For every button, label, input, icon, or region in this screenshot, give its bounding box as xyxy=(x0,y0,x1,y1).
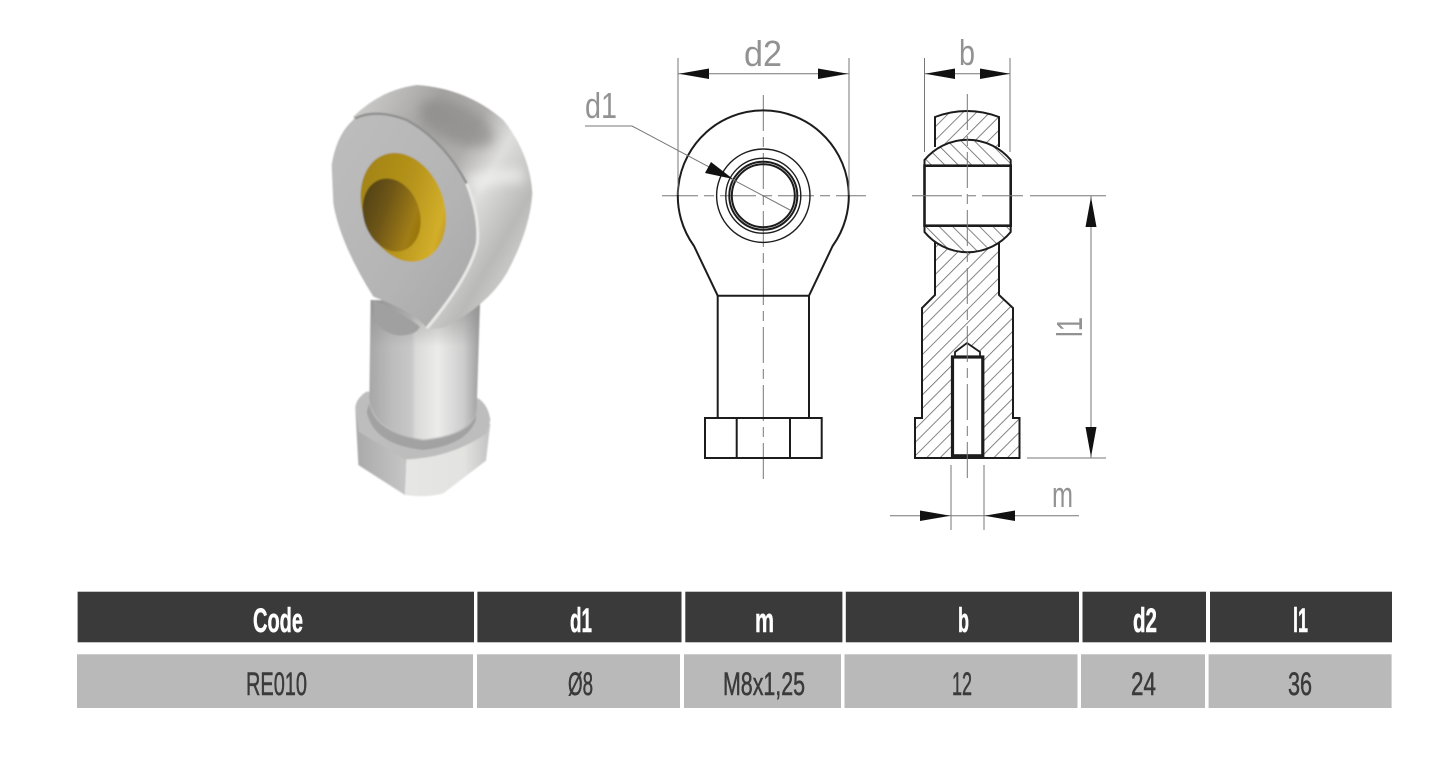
table header row: b xyxy=(958,602,969,640)
front view technical drawing xyxy=(585,33,866,480)
dimension d2: d2 xyxy=(744,33,782,74)
table header row: d1 xyxy=(570,602,592,640)
bearing circles xyxy=(717,149,810,242)
dimension d1 leader: d1 xyxy=(585,85,617,126)
dimension l1: l1 xyxy=(1049,317,1090,337)
photo: 3D rod end bearing xyxy=(332,85,532,496)
table data row: RE010 xyxy=(246,666,307,702)
table data row: 12 xyxy=(952,666,972,702)
table data row: Ø8 xyxy=(568,666,593,702)
side centre lines xyxy=(912,94,1106,480)
rim dark shading xyxy=(413,90,501,157)
table header row: m xyxy=(755,602,774,640)
table data row: 36 xyxy=(1288,666,1312,702)
dimension b xyxy=(924,32,1010,152)
dimension m: m xyxy=(1052,474,1073,515)
eye outer rim xyxy=(353,85,532,330)
table data row: M8x1,25 xyxy=(723,666,805,702)
bushing bore xyxy=(354,171,430,259)
rim highlight xyxy=(467,169,523,193)
table data row xyxy=(77,654,1392,708)
shaft outline xyxy=(718,296,809,418)
table data row: 24 xyxy=(1131,666,1156,702)
hex nut outline xyxy=(705,418,822,458)
table header row: l1 xyxy=(1293,602,1308,640)
side section technical drawing xyxy=(890,32,1106,530)
dimension b: b xyxy=(959,32,975,73)
threaded hole xyxy=(951,343,984,456)
dimension d2 xyxy=(678,33,849,195)
threaded base nut xyxy=(355,392,490,496)
table header row: Code xyxy=(253,602,303,640)
shaft shadow beneath eye xyxy=(370,300,480,347)
face edge shade xyxy=(355,114,467,183)
eye front face xyxy=(332,114,478,328)
cylindrical shaft xyxy=(369,300,480,439)
shaft collar shadow xyxy=(367,403,476,450)
spherical ball section xyxy=(924,140,1011,166)
dimension l1 xyxy=(1027,196,1106,458)
face edge highlight xyxy=(427,183,478,328)
table header row xyxy=(78,592,1392,642)
bore xyxy=(924,166,1011,226)
dimension d1 leader xyxy=(585,85,790,210)
eye outline xyxy=(678,110,849,296)
wedge flat xyxy=(373,300,420,336)
bronze bushing xyxy=(346,141,461,274)
front centre lines xyxy=(662,95,866,480)
table header row: d2 xyxy=(1133,602,1157,640)
dimension m xyxy=(890,465,1079,530)
body section xyxy=(915,240,1020,458)
housing top hatch xyxy=(935,111,999,147)
specification table xyxy=(77,592,1392,708)
